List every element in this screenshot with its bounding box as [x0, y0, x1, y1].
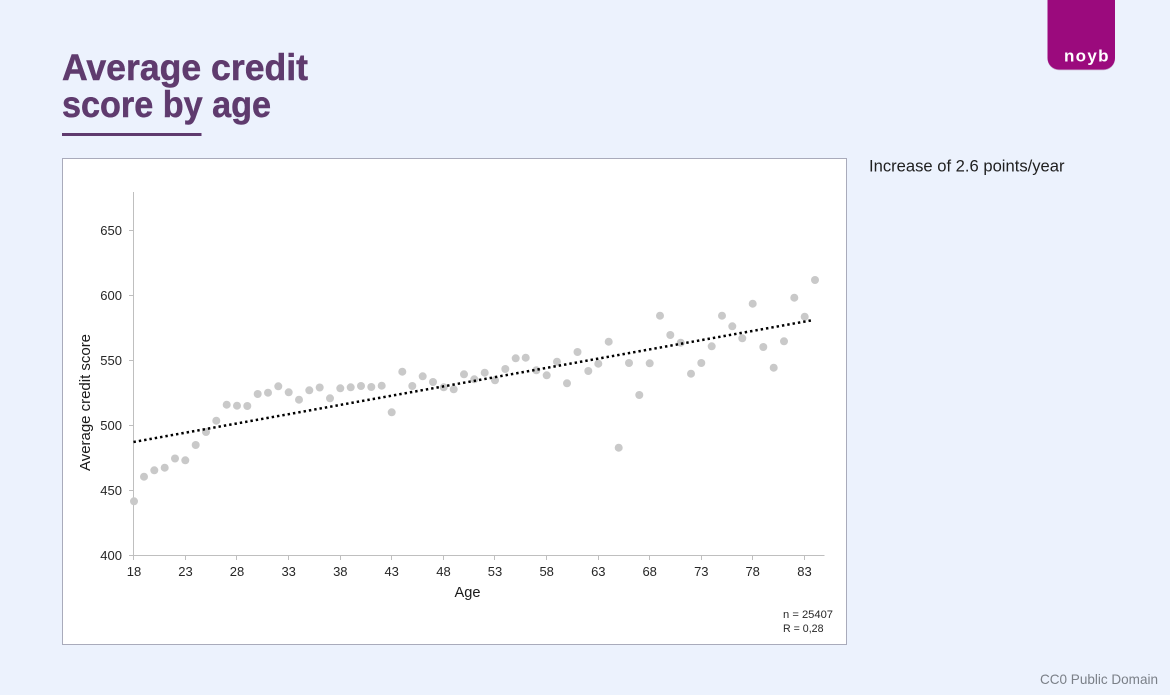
- y axis tick labels: 500: [100, 418, 122, 433]
- chart axes: [129, 192, 824, 560]
- annotation text: Increase of 2.6 points/year: [869, 158, 1065, 176]
- x axis tick labels: 43: [384, 564, 399, 579]
- chart stats note: n = 25407: [783, 609, 833, 621]
- y axis tick labels: 400: [100, 548, 122, 563]
- x axis tick labels: 78: [745, 564, 760, 579]
- y axis tick labels: 550: [100, 353, 122, 368]
- x axis tick labels: 28: [230, 564, 244, 579]
- scatter points: [130, 276, 819, 505]
- x axis tick labels: 73: [694, 564, 709, 579]
- chart stats note: [783, 609, 833, 635]
- logo: noyb: [1048, 0, 1115, 70]
- x axis tick labels: 38: [333, 564, 348, 579]
- license footer: CC0 Public Domain: [1040, 671, 1158, 687]
- x axis tick labels: 68: [642, 564, 657, 579]
- x axis tick labels: 63: [591, 564, 606, 579]
- x axis tick labels: 58: [539, 564, 554, 579]
- y axis tick labels: 600: [100, 288, 122, 303]
- y axis tick labels: 450: [100, 483, 122, 498]
- x axis tick labels: 83: [797, 564, 812, 579]
- trend line: [134, 320, 814, 442]
- x axis title: Age: [454, 584, 480, 601]
- x axis tick labels: 23: [178, 564, 193, 579]
- panel: chart: [62, 158, 846, 644]
- x axis tick labels: 33: [281, 564, 296, 579]
- title: Average credit: [62, 47, 308, 88]
- logo: noyb: noyb: [1064, 46, 1108, 66]
- y axis title: Average credit score: [78, 334, 94, 471]
- x axis tick labels: 48: [436, 564, 451, 579]
- x axis tick labels: 18: [127, 564, 141, 579]
- title: score by age: [62, 84, 271, 125]
- x axis tick labels: [127, 564, 812, 579]
- chart stats note: R = 0,28: [783, 623, 824, 635]
- y axis tick labels: 650: [100, 223, 122, 238]
- x axis tick labels: 53: [488, 564, 502, 579]
- y axis tick labels: [100, 223, 122, 563]
- title: [62, 47, 308, 125]
